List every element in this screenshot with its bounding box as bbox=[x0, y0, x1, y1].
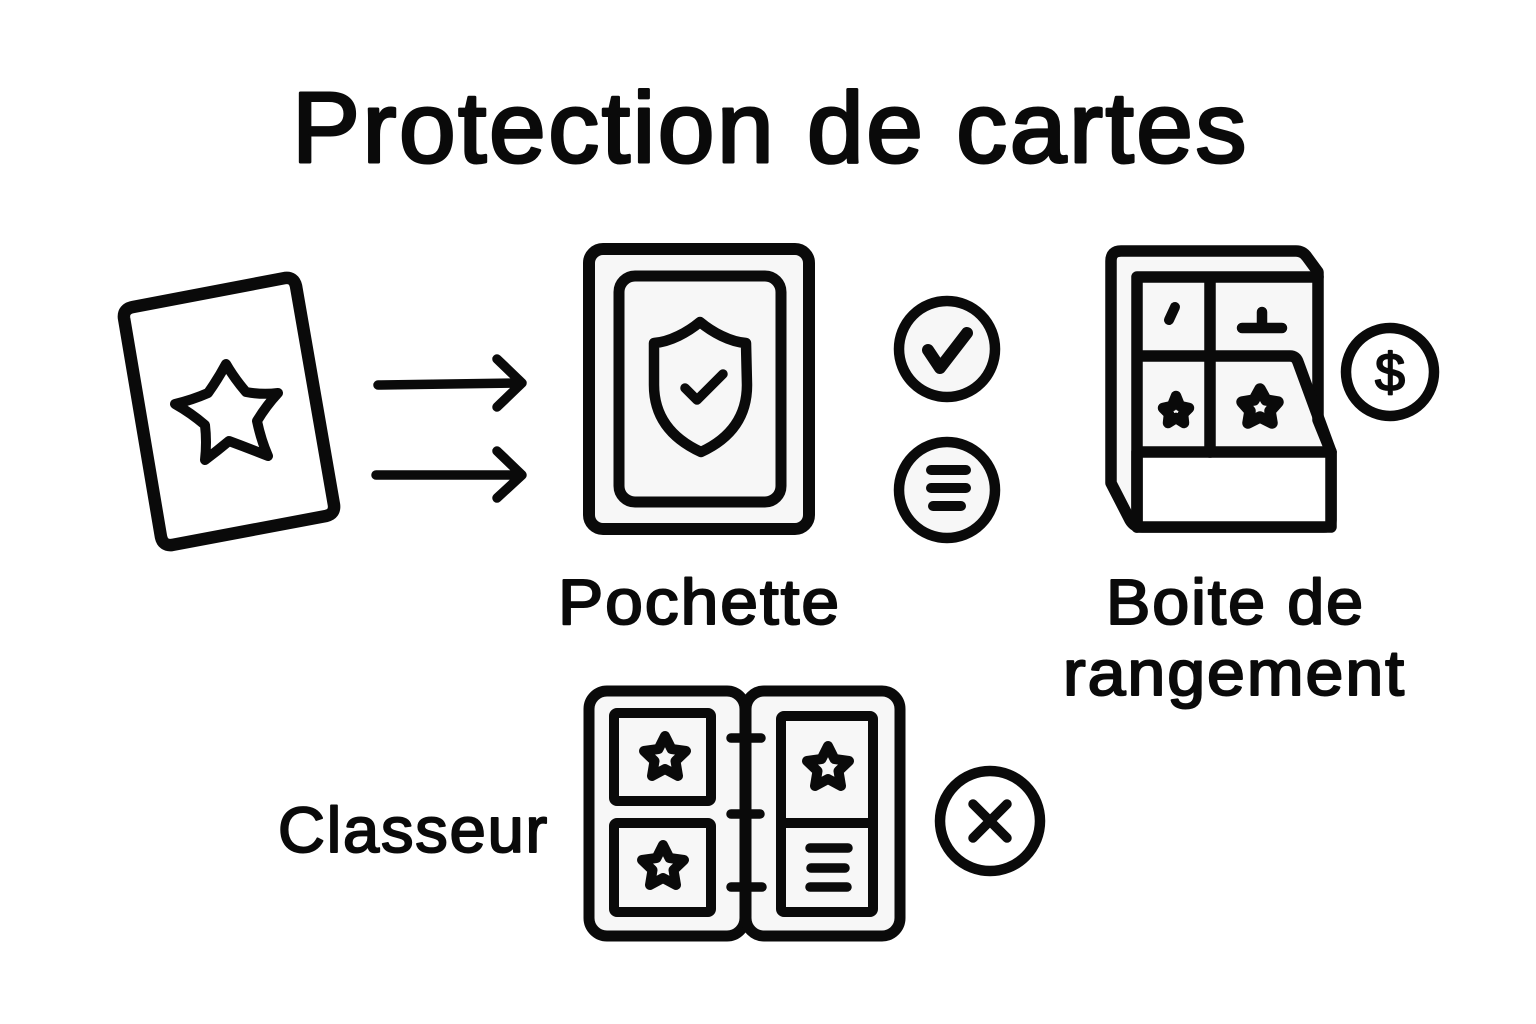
icon: binder bbox=[589, 691, 900, 936]
icon: dollar circle bbox=[1346, 328, 1434, 416]
icon: storage box bbox=[1111, 251, 1331, 527]
icon: card with star bbox=[124, 278, 334, 545]
icon: cross circle bbox=[940, 771, 1040, 871]
title: Protection de cartes bbox=[292, 72, 1249, 184]
arrow: top bbox=[378, 359, 522, 407]
icon: check circle bbox=[899, 301, 995, 397]
label: Boite de rangement bbox=[1063, 566, 1406, 709]
label: Boite de rangement: rangement bbox=[1063, 637, 1406, 709]
icon: dollar circle: $ bbox=[1375, 343, 1405, 403]
icon: pochette sleeve with shield bbox=[589, 249, 809, 529]
label: Classeur: Classeur bbox=[278, 794, 549, 866]
label: Pochette: Pochette bbox=[558, 566, 841, 638]
icon: list circle bbox=[899, 442, 995, 538]
arrow: bottom bbox=[376, 451, 522, 498]
label: Boite de rangement: Boite de bbox=[1106, 566, 1365, 638]
